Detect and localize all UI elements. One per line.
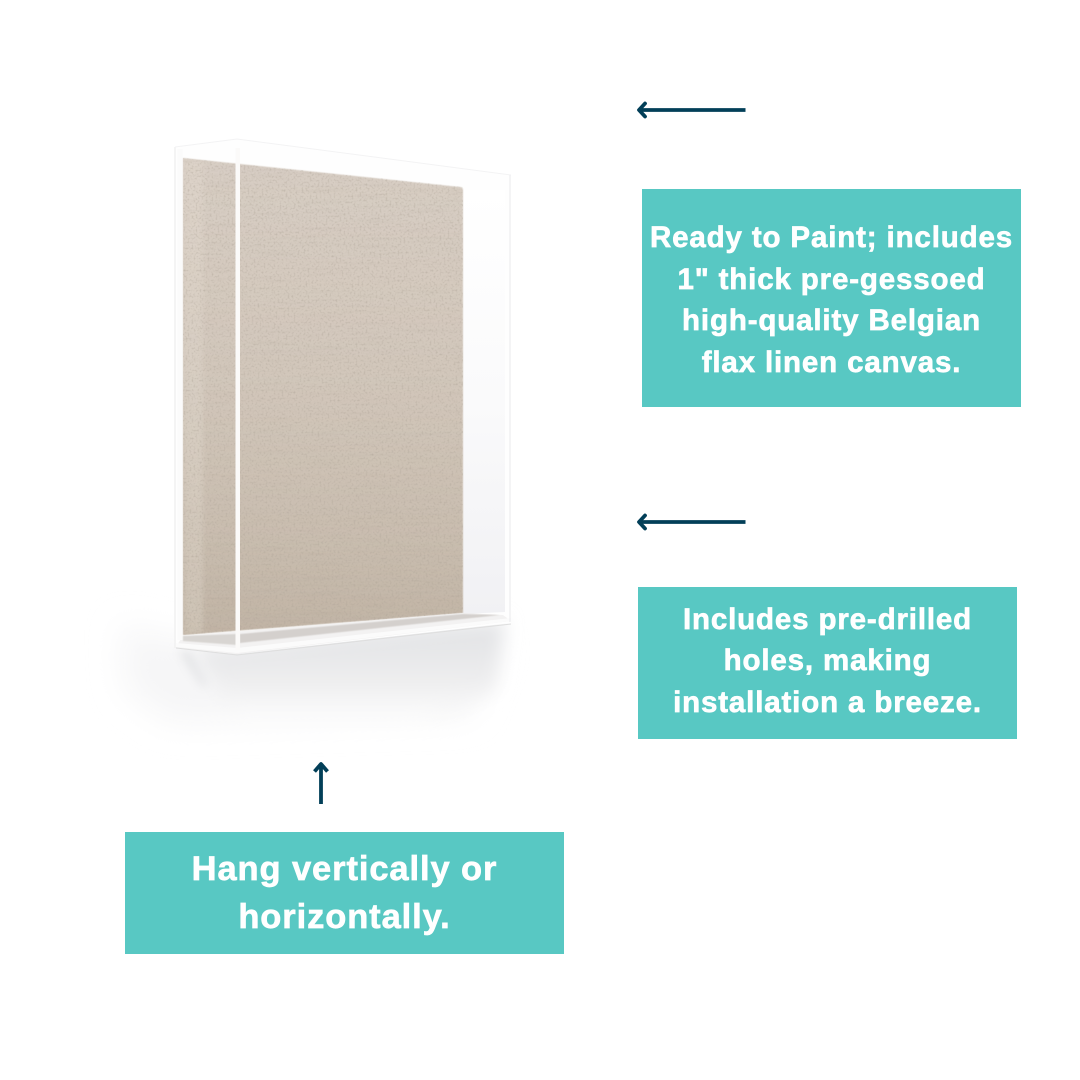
- callout: canvas: [642, 189, 1021, 407]
- linen canvas: [183, 157, 464, 637]
- callout: pre-drilled holes: [638, 587, 1017, 739]
- product photo: acrylic shadow box with linen canvas: [146, 138, 511, 707]
- callout: canvas: flax linen canvas.: [702, 346, 961, 379]
- acrylic box edges and bottom ledge: [175, 139, 511, 655]
- cast shadow under the box: [122, 620, 505, 725]
- callout: canvas: 1" thick pre-gessoed: [677, 263, 986, 296]
- arrow: middle callout pointer: [637, 514, 746, 530]
- callout: canvas: high-quality Belgian: [682, 304, 981, 337]
- callout: pre-drilled holes: installation a breeze.: [673, 686, 982, 719]
- callout: canvas: Ready to Paint; includes: [650, 221, 1013, 254]
- callout: hanging orientation: Hang vertically or: [192, 850, 497, 888]
- callout: hanging orientation: horizontally.: [238, 898, 451, 936]
- acrylic box back wall: [175, 139, 511, 654]
- callout: hanging orientation: [125, 832, 564, 954]
- callout: pre-drilled holes: holes, making: [724, 644, 931, 677]
- arrow: top callout pointer: [637, 102, 746, 118]
- arrow: bottom callout pointer: [313, 762, 329, 804]
- callout: pre-drilled holes: Includes pre-drilled: [683, 603, 972, 636]
